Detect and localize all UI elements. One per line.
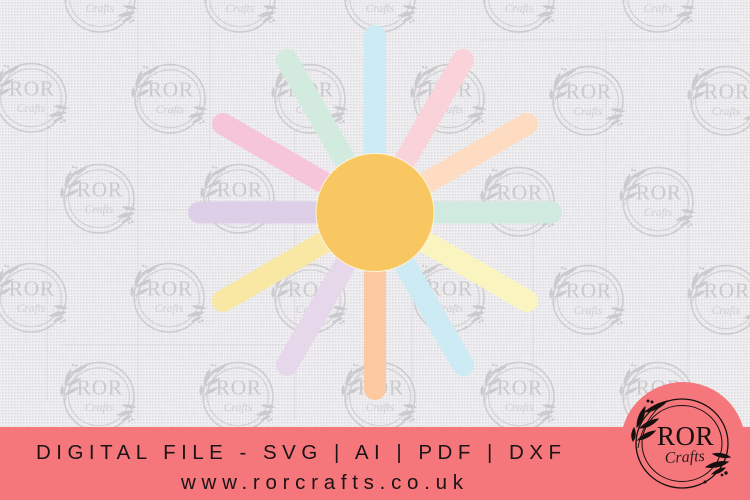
logo wordmark ROR: ROR [657, 421, 714, 451]
watermark row 4: Crafts [435, 303, 464, 315]
watermark row 5: Crafts [366, 402, 395, 414]
watermark row 4: ROR [427, 276, 473, 300]
watermark row 4: ROR [566, 278, 612, 302]
watermark row 2: ROR [427, 77, 473, 101]
watermark row 2: ROR [9, 76, 55, 100]
watermark row 3 [61, 165, 694, 236]
watermark row 3: ROR [497, 180, 543, 204]
sun rays [199, 36, 551, 389]
watermark row 2: Crafts [712, 106, 741, 118]
watermark row 4: ROR [147, 276, 193, 300]
watermark row 4 [0, 264, 750, 334]
watermark row 4: ROR [288, 277, 334, 301]
watermark row 1: Crafts [505, 3, 534, 15]
watermark row 1: Crafts [86, 3, 115, 15]
watermark row 2: Crafts [574, 106, 603, 118]
watermark row 2: Crafts [435, 104, 464, 116]
watermark row 4: ROR [9, 276, 55, 300]
watermark row 5: ROR [497, 375, 543, 399]
logo badge [620, 382, 746, 500]
watermark row 2: Crafts [156, 104, 185, 116]
watermark row 2 [0, 64, 750, 135]
watermark row 3: ROR [77, 177, 123, 201]
watermark row 4: Crafts [296, 304, 325, 316]
watermark row 5: Crafts [224, 402, 253, 414]
watermark row 5: ROR [358, 375, 404, 399]
watermark row 3: ROR [217, 177, 263, 201]
banner heading: file formats: DIGITAL FILE - SVG | AI | PDF | DXF [36, 441, 561, 464]
watermark row 5: Crafts [85, 402, 114, 414]
logo script Crafts: Crafts [664, 448, 705, 467]
watermark row 5: Crafts [644, 402, 673, 414]
watermark row 2: ROR [148, 77, 194, 101]
watermark row 3: Crafts [505, 207, 534, 219]
watermark row 5: ROR [636, 375, 682, 399]
watermark row 1 [62, 0, 694, 32]
watermark row 4: Crafts [574, 305, 603, 317]
watermark row 1: Crafts [226, 3, 255, 15]
watermark row 5: Crafts [505, 402, 534, 414]
watermark row 5: ROR [77, 375, 123, 399]
sun centre [316, 154, 434, 272]
watermark row 4: Crafts [17, 303, 46, 315]
watermark row 4: Crafts [712, 305, 741, 317]
watermark row 2: Crafts [296, 104, 325, 116]
watermark row 2: Crafts [17, 103, 46, 115]
watermark row 1: Crafts [366, 3, 395, 15]
watermark row 4: ROR [704, 278, 750, 302]
watermark row 4: Crafts [155, 303, 184, 315]
watermark row 3: ROR [636, 180, 682, 204]
watermark row 3: Crafts [85, 204, 114, 216]
website address: www.rorcrafts.co.uk [180, 471, 464, 494]
watermark row 5: ROR [216, 375, 262, 399]
sun illustration [199, 36, 551, 389]
watermark row 3: Crafts [225, 204, 254, 216]
logo rings and leaves [632, 399, 730, 488]
watermark row 1: Crafts [644, 3, 673, 15]
watermark row 5 [61, 363, 694, 431]
footer banner [0, 427, 750, 500]
watermark row 3: Crafts [644, 207, 673, 219]
watermark row 2: ROR [704, 79, 750, 103]
watermark row 2: ROR [566, 79, 612, 103]
watermark row 2: ROR [288, 77, 334, 101]
